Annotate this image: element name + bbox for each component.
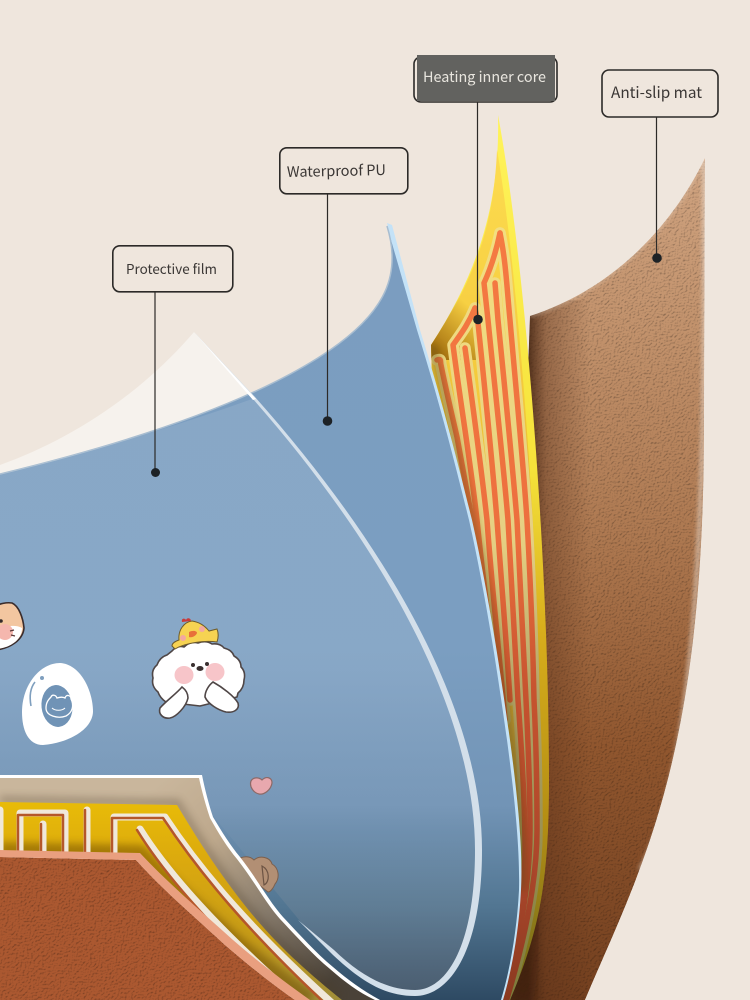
sticker: cat face (0, 603, 24, 650)
protective film over the blue sheet (0, 332, 482, 996)
sticker: frog egg (22, 663, 93, 745)
chick (172, 618, 218, 649)
layer: anti-slip mat (500, 158, 705, 1000)
layer: waterproof PU (0, 223, 521, 1000)
callout: heating inner core (414, 55, 557, 324)
callout: anti-slip mat: Anti-slip mat (611, 81, 702, 103)
callout: waterproof PU: Waterproof PU (287, 159, 386, 182)
heating wires, front (0, 810, 340, 1000)
callout: protective film (113, 246, 233, 477)
sticker: fluffy white character with chick (152, 618, 245, 718)
callout: protective film: Protective film (126, 258, 217, 278)
layer: heating inner core (425, 115, 549, 1000)
front corner: heating core layer (0, 802, 342, 1000)
layer: protective film top sheet (0, 332, 260, 480)
callout: waterproof PU (280, 148, 408, 426)
front corner: beige backing layer (0, 775, 380, 1000)
sticker: heart (251, 778, 272, 794)
heating wires (437, 233, 537, 1000)
front corner: anti-slip mat layer (0, 850, 310, 1000)
callout: anti-slip mat (602, 70, 718, 263)
sticker: brown character peeking (240, 857, 278, 892)
callout: heating inner core: Heating inner core (423, 66, 546, 87)
